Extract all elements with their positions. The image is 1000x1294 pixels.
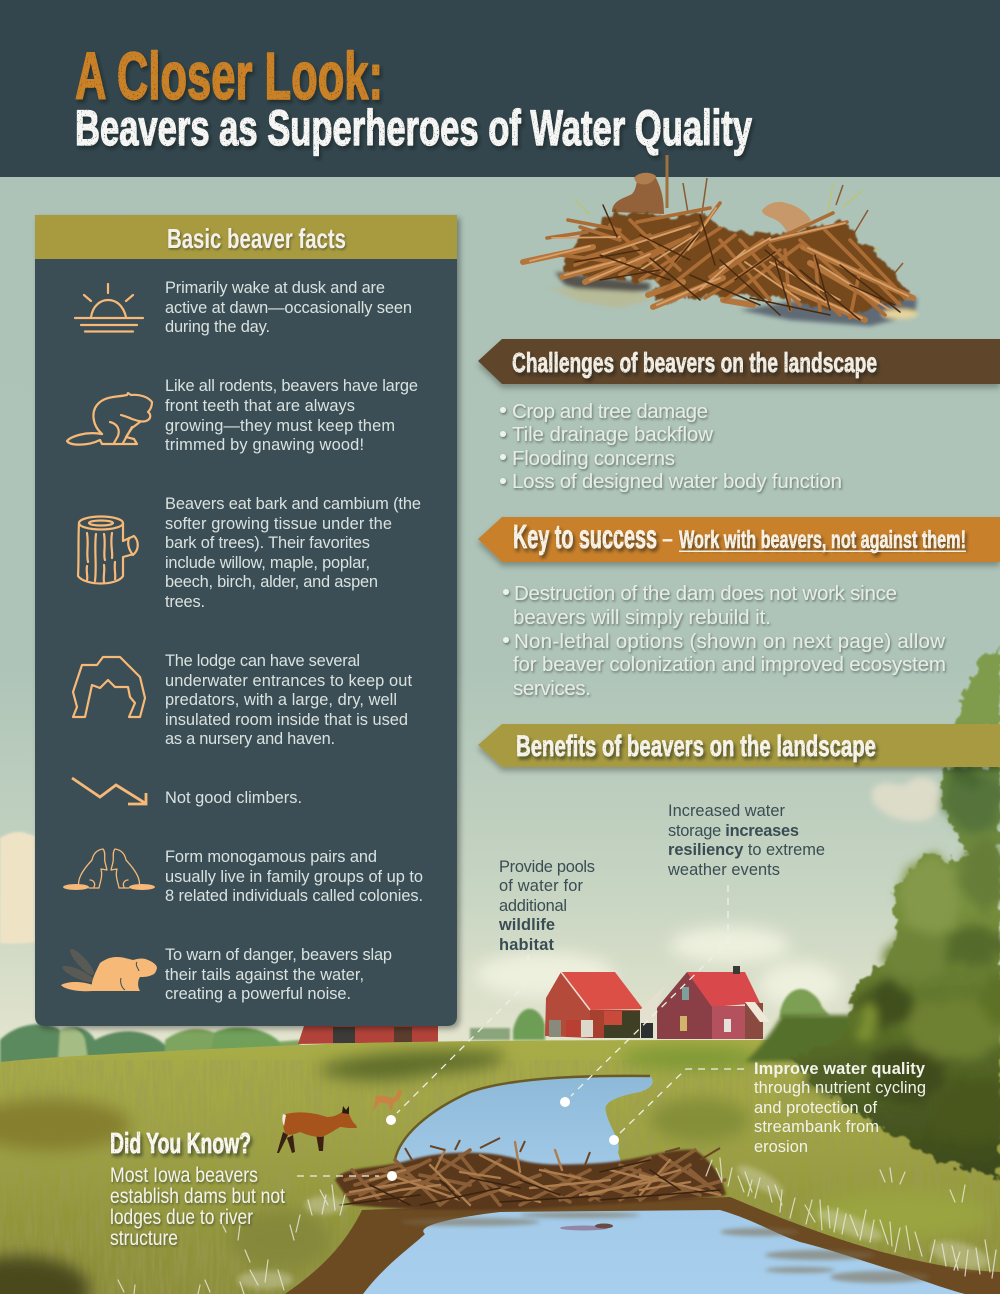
- fact: tail slap: creating a powerful noise.: [165, 985, 351, 1003]
- icon: beaver slapping tail: [61, 946, 157, 991]
- fact: diet: include willow, maple, poplar,: [165, 554, 370, 572]
- banner: key to success: –: [662, 526, 673, 553]
- key to success list: services.: [513, 677, 591, 700]
- callout: did you know: structure: [110, 1227, 178, 1250]
- callout: water quality: Improve water quality: [754, 1060, 926, 1078]
- mound base: [560, 214, 908, 315]
- key to success list: Non-lethal options (shown on next page) allow: [514, 630, 945, 653]
- fact: family groups: [165, 848, 423, 905]
- callout: wildlife habitat: additional: [499, 897, 567, 915]
- banner: challenges: [478, 339, 1000, 384]
- callout: wildlife habitat: [498, 858, 595, 954]
- distant tree line: [0, 989, 830, 1065]
- main logs: [523, 247, 913, 320]
- callout: did you know: [110, 1128, 285, 1250]
- callout: water quality: [754, 1060, 926, 1156]
- fact: lodge: insulated room inside that is used: [165, 711, 408, 729]
- callout: wildlife habitat: of water for: [499, 877, 584, 895]
- fact: diet: Beavers eat bark and cambium (the: [165, 495, 421, 513]
- key to success list: for beaver colonization and improved ecosystem: [513, 653, 946, 676]
- lower stream: [363, 1210, 965, 1294]
- grass tufts: [118, 1158, 996, 1294]
- banner: key to success: [478, 517, 1000, 562]
- fact: tail slap: To warn of danger, beavers slap: [165, 946, 392, 964]
- fact: activity: [165, 279, 412, 336]
- shadow sticks: [575, 205, 900, 320]
- deer, adult: [277, 1106, 357, 1153]
- hedgerow: [745, 1015, 860, 1062]
- fact: lodge: underwater entrances to keep out: [165, 672, 412, 690]
- icon: log: [78, 516, 138, 584]
- right beaver: [762, 202, 811, 238]
- lower muddy bank: [285, 1197, 1000, 1294]
- left beaver: [612, 173, 664, 214]
- reeds and grass: [666, 155, 668, 208]
- fact: diet: bark of trees). Their favorites: [165, 534, 370, 552]
- banner: key to success: Key to success: [513, 518, 657, 555]
- challenges list: Flooding concerns: [512, 447, 675, 470]
- upper stream: [395, 1076, 653, 1178]
- muddy bank upper: [395, 1076, 650, 1160]
- callout: water storage: [667, 802, 825, 879]
- fact: family groups: 8 related individuals called colonies.: [165, 887, 423, 905]
- callout: water storage: resiliency to extreme: [668, 841, 825, 859]
- clouds: [0, 778, 941, 1007]
- beaver lodge illustration with two beavers: [523, 155, 918, 326]
- distant red barn: [298, 1026, 438, 1044]
- callout: water storage: storage increases: [668, 822, 799, 840]
- water reflections: [400, 1212, 930, 1283]
- fact: diet: beech, birch, alder, and aspen: [165, 573, 378, 591]
- challenges list: [500, 400, 842, 493]
- callout: wildlife habitat: habitat: [499, 936, 555, 954]
- water under lodge: [548, 272, 918, 326]
- title: [75, 39, 752, 156]
- panel heading: Basic beaver facts: [167, 223, 346, 254]
- key to success list: [503, 582, 946, 700]
- challenges list: Tile drainage backflow: [512, 423, 713, 446]
- panel: basic beaver facts: [35, 215, 457, 1026]
- fact: activity: during the day.: [165, 318, 270, 336]
- callout: water quality: through nutrient cycling: [754, 1079, 926, 1097]
- top tree above banner: [955, 648, 1000, 726]
- challenges list: Crop and tree damage: [512, 400, 708, 423]
- callout leader lines: [297, 885, 745, 1176]
- callout: did you know: establish dams but not: [110, 1185, 285, 1208]
- title line one: A Closer Look:: [75, 39, 383, 114]
- fact: lodge: The lodge can have several: [165, 652, 360, 670]
- fact: diet: softer growing tissue under the: [165, 515, 392, 533]
- fact: activity: Primarily wake at dusk and are: [165, 279, 385, 297]
- key to success list: beavers will simply rebuild it.: [513, 606, 771, 629]
- callout: water storage: Increased water: [668, 802, 786, 820]
- fact: family groups: usually live in family groups of up to: [165, 868, 423, 886]
- callout: water quality: streambank from: [754, 1118, 879, 1136]
- header band: [0, 0, 1000, 177]
- fact: teeth: trimmed by gnawing wood!: [165, 436, 364, 454]
- fact: activity: active at dawn—occasionally seen: [165, 299, 412, 317]
- fact: teeth: front teeth that are always: [165, 397, 355, 415]
- fact: tail slap: their tails against the water,: [165, 966, 364, 984]
- right tree mass: [790, 765, 1000, 1178]
- landscape illustration: [0, 648, 1000, 1294]
- icon: beaver gnawing: [67, 393, 152, 445]
- key to success list: Destruction of the dam does not work since: [514, 582, 897, 605]
- callout: water storage: weather events: [667, 861, 780, 879]
- panel body: [35, 215, 457, 1026]
- icon: beaver pair: [63, 849, 155, 890]
- fact: diet: trees.: [165, 593, 205, 611]
- icon: downward arrow: [72, 778, 146, 804]
- callout: wildlife habitat: Provide pools: [499, 858, 595, 876]
- callout: did you know: lodges due to river: [110, 1206, 253, 1229]
- challenges list: Loss of designed water body function: [512, 470, 842, 493]
- fact: tail slap: [165, 946, 392, 1003]
- fact: diet: [165, 495, 421, 611]
- ground: [0, 1040, 1000, 1294]
- beaver dam, lower: [335, 1138, 726, 1210]
- fact: teeth: growing—they must keep them: [165, 417, 395, 435]
- medium sticks: [547, 203, 905, 318]
- callout: water quality: and protection of: [754, 1099, 877, 1117]
- icon: sunrise: [75, 284, 143, 332]
- fact: teeth: Like all rodents, beavers have large: [165, 377, 418, 395]
- pale grass along the bank: [237, 1160, 992, 1289]
- fact: lodge: as a nursery and haven.: [165, 730, 335, 748]
- farmhouse: [640, 966, 770, 1039]
- deer, fawn: [373, 1090, 402, 1110]
- barn: [545, 972, 643, 1038]
- callout: did you know: Did You Know?: [110, 1128, 251, 1160]
- callout: did you know: Most Iowa beavers: [110, 1164, 258, 1187]
- fact: family groups: Form monogamous pairs and: [165, 848, 377, 866]
- panel header bar: [35, 215, 457, 259]
- callout: wildlife habitat: wildlife: [498, 916, 555, 934]
- highlight sticks: [530, 208, 908, 318]
- callout marker dots: [386, 1097, 619, 1181]
- fact: teeth: [165, 377, 418, 454]
- callout: water quality: erosion: [754, 1138, 808, 1156]
- ground shading: [0, 1046, 1000, 1294]
- swimming beaver: [560, 1224, 613, 1230]
- fact: climbers: Not good climbers.: [165, 789, 302, 807]
- icon: lodge: [73, 657, 145, 717]
- fact: lodge: predators, with a large, dry, well: [165, 691, 397, 709]
- fact: lodge: [165, 652, 412, 748]
